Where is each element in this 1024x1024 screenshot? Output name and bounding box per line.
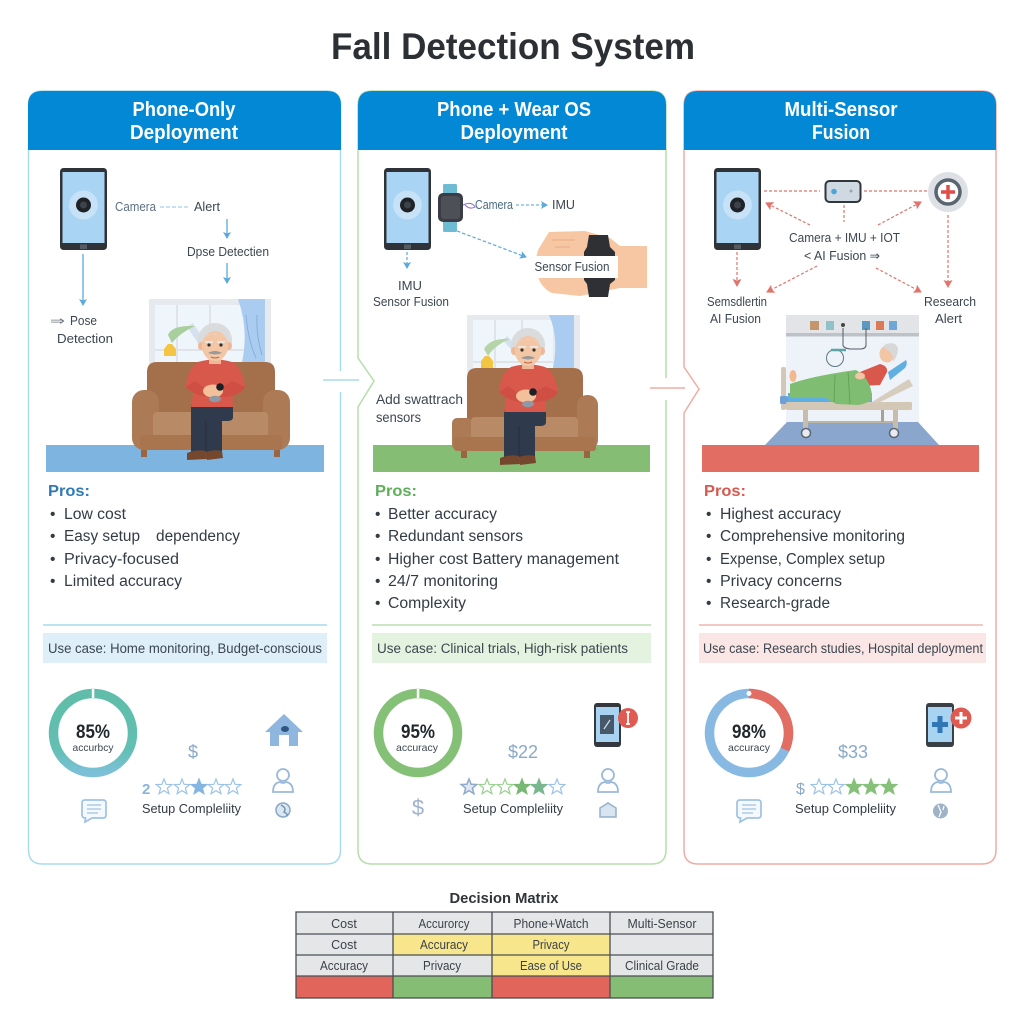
matrix table: Accuracy <box>420 938 469 952</box>
connector arrow: panel 1 to 2 <box>323 379 359 381</box>
setup complexity rating <box>461 779 565 816</box>
icon: user <box>931 769 951 792</box>
donut: 85% accuracy: 85% <box>76 722 110 743</box>
icon: house <box>265 714 303 746</box>
icon: small house <box>600 803 616 817</box>
diagram: multi-sensor fusion network: Alert <box>935 312 963 326</box>
donut: 85% accuracy: accurbcy <box>72 742 114 754</box>
matrix title: Decision Matrix <box>450 891 558 907</box>
diagram: multi-sensor fusion network <box>707 168 976 326</box>
pros list: Pros: <box>48 483 90 500</box>
illustration: patient in hospital bed <box>702 315 979 472</box>
pros list: Expense, Complex setup <box>720 551 885 568</box>
pros list: • <box>375 573 380 590</box>
pros list: Better accuracy <box>388 506 497 523</box>
pros list: 24/7 monitoring <box>388 573 498 590</box>
pros list: Easy setup <box>64 528 140 545</box>
donut: 95% accuracy <box>378 689 458 772</box>
panel: multi-sensor fusion <box>650 91 996 864</box>
setup complexity rating <box>142 779 241 816</box>
pros list: • <box>706 573 711 590</box>
diagram: multi-sensor fusion network: Semsdlertin <box>707 295 767 309</box>
pros list: • <box>50 528 55 545</box>
use case: Use case: Research studies, Hospital deployment <box>703 641 983 656</box>
icon: user <box>273 769 293 792</box>
pros list: • <box>706 551 711 568</box>
diagram: phone and watch flow <box>373 168 647 309</box>
pros list <box>48 483 240 590</box>
icon: message <box>82 800 106 822</box>
label: add sensors: sensors <box>376 410 421 425</box>
icon: medical target <box>928 172 968 212</box>
use case <box>699 633 986 663</box>
icon: small badge <box>276 803 290 817</box>
pros list: Complexity <box>388 595 466 612</box>
icon: iot sensor <box>826 181 860 202</box>
pros list: Pros: <box>375 483 417 500</box>
matrix table: Privacy <box>423 959 462 973</box>
icon: dollar: $ <box>412 795 424 820</box>
diagram: phone camera flow: Dpse Detectien <box>187 245 269 259</box>
pros list: • <box>50 551 55 568</box>
matrix table: Phone+Watch <box>514 917 589 931</box>
diagram: phone and watch flow: IMU <box>552 198 575 212</box>
header: phone + wear os: Deployment <box>460 121 568 144</box>
setup complexity rating: Setup Compleliity <box>463 801 563 816</box>
diagram: multi-sensor fusion network: Research <box>924 295 976 309</box>
header: phone-only <box>28 91 341 150</box>
pros list: Privacy concerns <box>720 573 842 590</box>
donut: 98% accuracy: accuracy <box>728 742 771 754</box>
diagram: phone and watch flow: IMU <box>398 279 422 293</box>
header: phone-only: Deployment <box>130 121 238 144</box>
diagram: phone and watch flow: Camera <box>475 198 513 212</box>
pros list: Low cost <box>64 506 127 523</box>
pros list: • <box>375 551 380 568</box>
label: add sensors: Add swattrach <box>376 392 463 407</box>
pros list <box>375 483 620 612</box>
pros list: Pros: <box>704 483 746 500</box>
setup complexity rating: 2 <box>142 781 150 798</box>
title: Fall Detection System <box>331 26 695 67</box>
icon: phone with alert <box>594 703 638 747</box>
pros list: Redundant sensors <box>388 528 523 545</box>
setup complexity rating <box>795 779 897 816</box>
pros list: Research-grade <box>720 595 830 612</box>
matrix table: Cost <box>331 938 357 952</box>
diagram: phone camera flow: Pose <box>70 314 97 328</box>
pros list <box>704 483 905 612</box>
pros list: Highest accuracy <box>720 506 841 523</box>
use case: Use case: Clinical trials, High-risk patients <box>377 641 628 656</box>
donut: 85% accuracy <box>54 689 132 772</box>
header: phone + wear os <box>358 91 666 150</box>
matrix table: Clinical Grade <box>625 959 699 973</box>
connector arrow: panel 2 to 3 <box>650 387 685 389</box>
donut: 98% accuracy: 98% <box>732 722 766 743</box>
diagram: phone camera flow: Detection <box>57 332 113 346</box>
matrix table: Accuracy <box>320 959 369 973</box>
illustration: hand wearing watch: Sensor Fusion <box>534 260 610 274</box>
pros list: • <box>50 573 55 590</box>
header: phone + wear os: Phone + Wear OS <box>437 98 591 121</box>
diagram: phone camera flow: Camera <box>115 200 156 214</box>
matrix table: Accurorcy <box>418 917 470 931</box>
setup complexity rating: Setup Compleliity <box>795 801 896 816</box>
illustration: senior on sofa at home <box>46 299 324 472</box>
pros list: Higher cost Battery management <box>388 551 620 568</box>
pros list: • <box>706 506 711 523</box>
diagram: multi-sensor fusion network: Camera + IMU + IOT <box>789 231 900 245</box>
pros list: Comprehensive monitoring <box>720 528 905 545</box>
diagram: phone and watch flow: Sensor Fusion <box>373 295 449 309</box>
panel: phone + wear os deployment <box>323 91 670 864</box>
use case <box>372 633 651 663</box>
pros list: • <box>375 528 380 545</box>
panel: phone-only deployment <box>28 91 344 864</box>
pros list: dependency <box>156 528 240 545</box>
header: multi-sensor: Fusion <box>812 121 870 144</box>
cost label: $33 <box>838 742 868 762</box>
cost icon: $ <box>188 742 198 762</box>
use case <box>43 633 327 663</box>
label: add sensors <box>376 392 463 425</box>
pros list: • <box>375 506 380 523</box>
setup complexity rating: $ <box>796 781 805 798</box>
header: multi-sensor <box>684 91 996 150</box>
pros list: Limited accuracy <box>64 573 182 590</box>
use case: Use case: Home monitoring, Budget-conscious <box>48 641 322 656</box>
diagram: phone camera flow <box>50 168 269 346</box>
pros list: • <box>50 506 55 523</box>
matrix table: Cost <box>331 917 357 931</box>
decision matrix <box>296 891 713 998</box>
icon: user <box>598 769 618 792</box>
icon: small globe <box>933 804 948 818</box>
matrix table: Ease of Use <box>520 959 582 973</box>
header: multi-sensor: Multi-Sensor <box>784 98 898 121</box>
illustration: senior on sofa with watch <box>373 315 650 472</box>
pros list: • <box>706 595 711 612</box>
header: phone-only: Phone-Only <box>132 98 236 121</box>
icon: message <box>737 800 761 822</box>
matrix table: Multi-Sensor <box>628 917 696 931</box>
donut: 98% accuracy <box>710 691 789 772</box>
donut: 95% accuracy: accuracy <box>396 742 439 754</box>
setup complexity rating: Setup Compleliity <box>142 801 241 816</box>
diagram: multi-sensor fusion network: < AI Fusion ⇒ <box>804 249 881 263</box>
diagram: phone camera flow: Alert <box>194 200 221 214</box>
pros list: Privacy-focused <box>64 551 179 568</box>
icon: phone with plus <box>926 703 972 747</box>
pros list: • <box>375 595 380 612</box>
diagram: phone camera flow: ⇒ <box>50 314 66 328</box>
matrix table: Privacy <box>532 938 570 952</box>
cost label: $22 <box>508 742 538 762</box>
illustration: hand wearing watch <box>534 231 647 297</box>
pros list: • <box>706 528 711 545</box>
matrix table <box>296 912 713 998</box>
diagram: multi-sensor fusion network: AI Fusion <box>710 312 761 326</box>
donut: 95% accuracy: 95% <box>401 722 435 743</box>
